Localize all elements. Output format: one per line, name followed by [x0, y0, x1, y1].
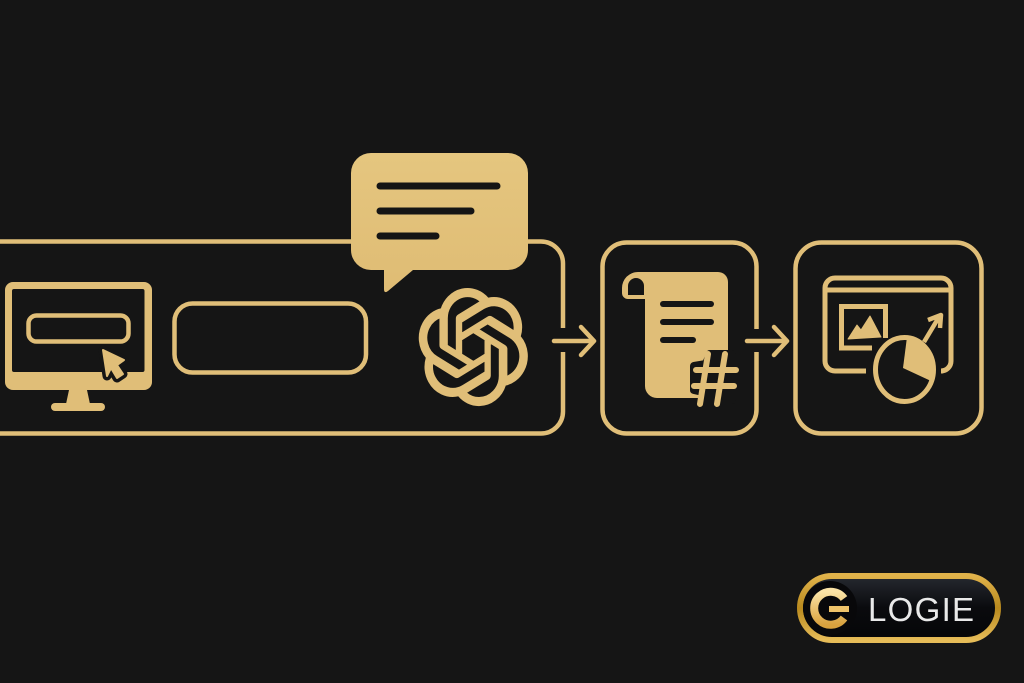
logo badge [800, 576, 998, 640]
icon: scroll document with hash [622, 272, 736, 404]
arrow: container to document [554, 327, 594, 355]
panel: dashboard step [796, 242, 982, 434]
icon: hash symbol [694, 354, 736, 404]
icon: mouse cursor [103, 350, 124, 378]
icon: growth arrow [924, 315, 941, 342]
panel: main process container [0, 242, 563, 434]
icon: dashboard window with image and pie chart [825, 278, 951, 402]
icon: desktop monitor with search field [5, 282, 152, 411]
icon: pie chart [876, 337, 934, 402]
arrow: document to dashboard [747, 327, 787, 355]
icon: logo C mark [814, 592, 844, 625]
panel: document step [602, 242, 756, 434]
icon: speech bubble [351, 153, 528, 292]
logo wordmark: LOGIE [868, 591, 975, 628]
icon: picture frame [842, 306, 886, 348]
icon: interlaced knot logo [419, 289, 527, 405]
input pill placeholder [174, 304, 366, 372]
